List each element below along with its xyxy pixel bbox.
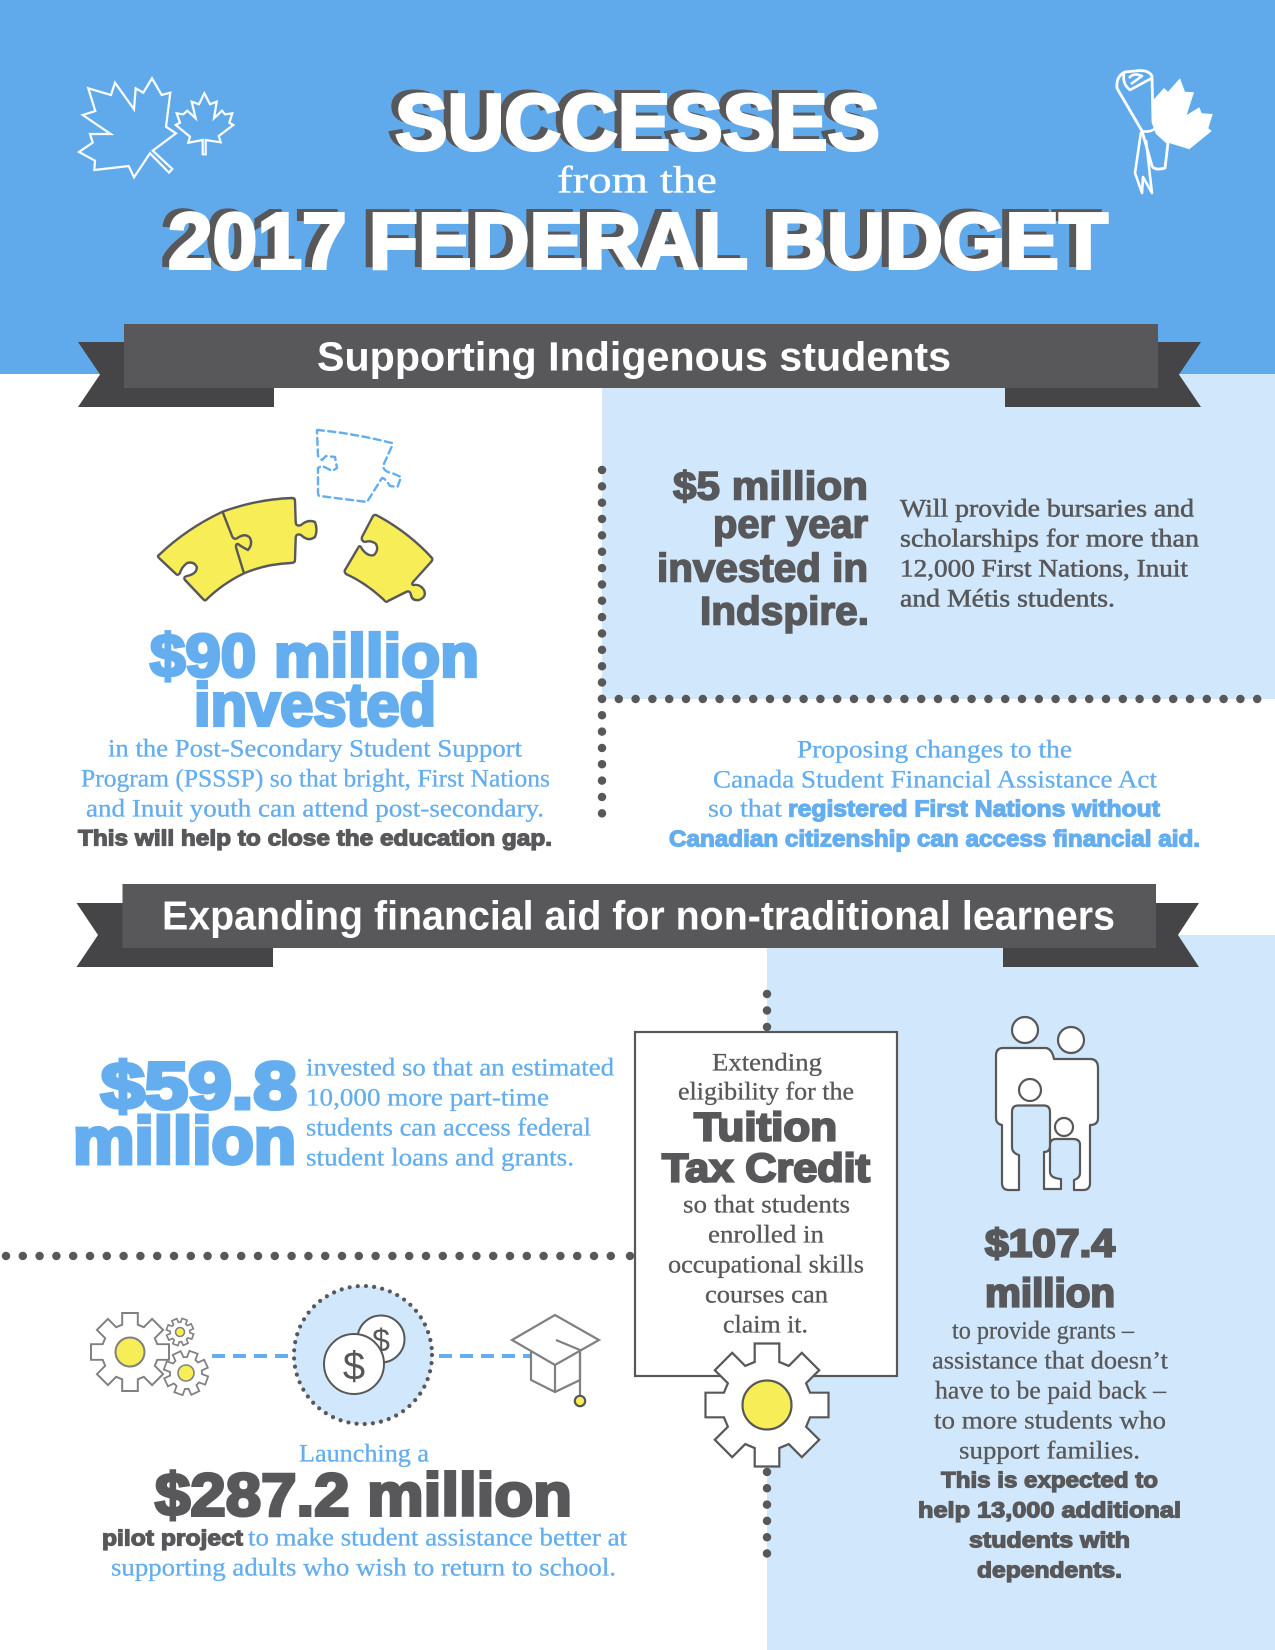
divider: dotted horizontal lower (6, 1252, 626, 1260)
text block: tuition tax credit (662, 1050, 870, 1339)
text block: Proposing changes (669, 737, 1200, 852)
text block: PSSSP: in the Post-Secondary Student Support (108, 736, 522, 763)
heading: $5 million per year invested in Indspire: per year (713, 503, 868, 547)
heading: $90 million invested: invested (194, 672, 436, 739)
text block: grants: support families. (959, 1438, 1140, 1465)
divider: dotted vertical upper (763, 994, 771, 1030)
text: Launching a: Launching a (299, 1441, 429, 1468)
text block: Proposing changes: Canadian citizenship can access financial aid. (669, 826, 1200, 852)
text block: grants: help 13,000 additional (918, 1498, 1181, 1523)
text block: pilot project: to make student assistance better at (248, 1525, 627, 1552)
ribbon: Supporting Indigenous students: Supporting Indigenous students (317, 334, 951, 380)
text block: grants (918, 1318, 1181, 1583)
title: 2017 FEDERAL BUDGET: 2017 FEDERAL BUDGET (168, 197, 1108, 286)
text block: tuition tax credit: occupational skills (668, 1252, 864, 1279)
text block: bursaries: Will provide bursaries and (900, 496, 1195, 523)
text block: grants: have to be paid back – (935, 1378, 1167, 1405)
icon: scroll with maple leaf (1117, 71, 1213, 193)
text block: pilot project: pilot project (102, 1526, 244, 1551)
title: from the: from the (557, 160, 717, 202)
heading: $90 million invested: $90 million (150, 623, 479, 690)
heading: $59.8 million: $59.8 (101, 1049, 297, 1123)
dot left of box (626, 1252, 634, 1260)
text block: pilot project: supporting adults who wish to return to school. (111, 1555, 616, 1582)
text block: Proposing changes: Proposing changes to the (797, 737, 1072, 764)
text block: PSSSP: This will help to close the education gap. (78, 826, 552, 851)
text block: tuition tax credit: Tax Credit (662, 1147, 870, 1191)
text block: grants: This is expected to (941, 1468, 1158, 1493)
text block: part-time students: students can access federal (306, 1115, 591, 1142)
connector: dashed blue (212, 1354, 531, 1358)
text block: bursaries (900, 496, 1200, 613)
text block: part-time students (306, 1055, 615, 1172)
heading: $59.8 million: million (73, 1104, 296, 1178)
text block: Proposing changes: so that (708, 796, 782, 823)
divider: dotted vertical lower (763, 1472, 771, 1555)
icon: coins circle: $ (372, 1323, 390, 1359)
icon: coins circle: $ (343, 1345, 365, 1389)
icon: family (996, 1017, 1098, 1190)
icon: gears (91, 1313, 214, 1401)
panel: light blue Indspire (602, 374, 1275, 699)
heading: $5 million per year invested in Indspire (657, 465, 869, 634)
text block: grants: to provide grants – (952, 1318, 1134, 1345)
text block: grants: students with (969, 1528, 1130, 1553)
heading: $5 million per year invested in Indspire: Indspire. (700, 590, 869, 634)
divider: dotted horizontal (602, 695, 1264, 703)
text block: tuition tax credit: enrolled in (708, 1222, 825, 1249)
text block: tuition tax credit: Extending (712, 1050, 823, 1077)
divider: dotted vertical (598, 470, 606, 814)
icon: maple leaves outline (79, 78, 233, 177)
text block: grants: to more students who (934, 1408, 1166, 1435)
text block: PSSSP: Program (PSSSP) so that bright, First Nations (81, 766, 550, 793)
heading: $107.4 million: million (985, 1272, 1115, 1316)
text block: Proposing changes: registered First Nations without (788, 796, 1160, 822)
text block: Proposing changes: Canada Student Financial Assistance Act (713, 767, 1157, 794)
text block: PSSSP (78, 736, 552, 851)
text block: grants: dependents. (977, 1558, 1122, 1583)
text block: tuition tax credit: eligibility for the (678, 1079, 854, 1106)
heading: $107.4 million (985, 1223, 1115, 1316)
title: SUCCESSES: SUCCESSES (395, 78, 880, 167)
heading: $59.8 million (73, 1049, 297, 1178)
text block: tuition tax credit: so that students (683, 1192, 850, 1219)
ribbon: Supporting Indigenous students (78, 324, 1201, 407)
text block: tuition tax credit: Tuition (694, 1106, 837, 1150)
heading: $287.2 million: $287.2 million (155, 1462, 572, 1529)
icon: graduation cap (512, 1315, 599, 1406)
text block: tuition tax credit: claim it. (723, 1312, 808, 1339)
header background (0, 0, 1275, 374)
panel: tuition tax credit box (635, 1032, 897, 1376)
text block: bursaries: 12,000 First Nations, Inuit (900, 556, 1188, 583)
icon: puzzle pieces (158, 430, 432, 602)
text block: tuition tax credit: courses can (705, 1282, 829, 1309)
text block: pilot project (102, 1525, 627, 1582)
icon: coins circle (294, 1286, 432, 1424)
text block: bursaries: and Métis students. (900, 586, 1115, 613)
ribbon: Expanding financial aid: Expanding financial aid for non-traditional learners (162, 893, 1115, 939)
text block: part-time students: 10,000 more part-time (306, 1085, 549, 1112)
text block: part-time students: invested so that an estimated (306, 1055, 615, 1082)
text block: grants: assistance that doesn’t (932, 1348, 1168, 1375)
heading: $107.4 million: $107.4 (985, 1223, 1115, 1266)
ribbon: Expanding financial aid (76, 884, 1199, 967)
heading: $90 million invested (150, 623, 479, 739)
icon: large gear (706, 1344, 828, 1466)
text block: PSSSP: and Inuit youth can attend post-secondary. (86, 796, 544, 823)
heading: $5 million per year invested in Indspire: $5 million (673, 465, 868, 509)
panel: light blue family (767, 935, 1275, 1650)
text block: part-time students: student loans and grants. (306, 1145, 574, 1172)
heading: $5 million per year invested in Indspire: invested in (657, 547, 868, 591)
text block: bursaries: scholarships for more than (900, 526, 1200, 553)
